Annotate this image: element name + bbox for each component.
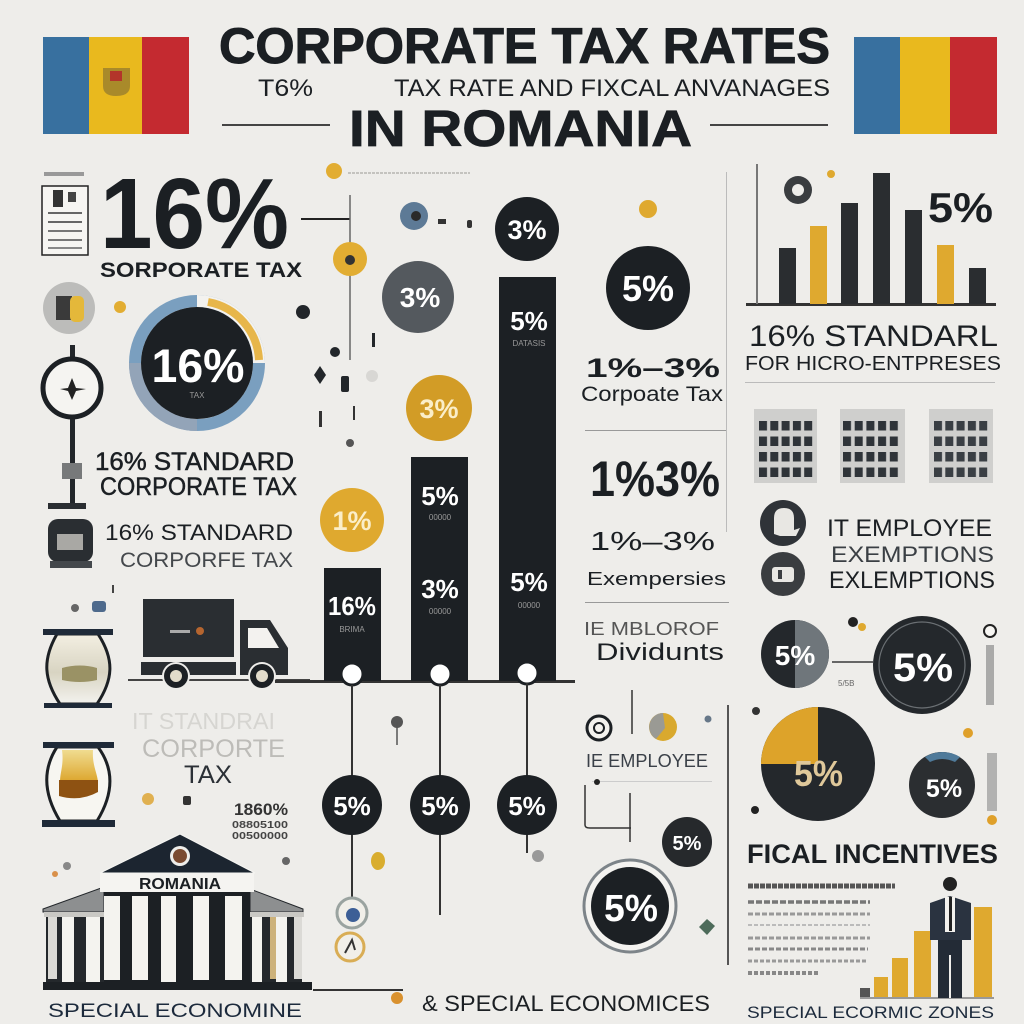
central bar chart: 16% [328, 591, 376, 621]
small print [232, 800, 289, 842]
label: 1%-3% exempersies: 1%–3% [590, 526, 715, 556]
big stat: 16% corporate tax: 16% [100, 158, 289, 270]
badge: 3% gold: 3% [419, 394, 459, 424]
small print: 1860% [234, 800, 288, 819]
label: 1%-3% exempersies [585, 526, 729, 603]
title: T6% [258, 75, 313, 102]
connector stems with 5% badges: 5% [333, 791, 371, 821]
label: dividends [584, 619, 724, 666]
small marks near truck [71, 585, 114, 612]
badge: 1% gold [320, 488, 384, 552]
icon: delivery truck [128, 599, 310, 690]
title: IN ROMANIA [349, 100, 692, 157]
badge: 5% large: 5% [622, 268, 674, 309]
pie chart: 5% [761, 707, 875, 821]
badge: 5% ring: 5/5B [838, 679, 854, 688]
donut: 16% tax: TAX [190, 391, 205, 400]
donut: 16% tax [135, 301, 259, 425]
small icons under stems [313, 716, 544, 1004]
icon: grid panels [754, 409, 993, 483]
icon: hourglass 2 [42, 742, 115, 827]
badge: 5% ring large: 5% [604, 888, 658, 930]
label: IT employee exemptions: EXEMPTIONS [831, 542, 994, 567]
pie badge: 5% half [761, 620, 829, 688]
badge: 5% small grey [751, 707, 997, 825]
badge: 1% gold: 1% [332, 506, 372, 536]
label: IT standard corporate tax, faded: IT STANDRAI [132, 708, 275, 734]
connector stems with 5% badges: 5% [421, 791, 459, 821]
central bar chart: 5% [421, 481, 459, 511]
central bar chart: 00000 [518, 601, 541, 610]
label: dividends: Dividunts [596, 639, 724, 666]
label: 16% standard corporate tax: 16% STANDARD [95, 448, 294, 476]
central bar chart: DATASIS [512, 339, 546, 348]
label: IT employee exemptions: EXLEMPTIONS [829, 567, 995, 594]
label: 1%-3% corporate tax: 1%–3% [586, 353, 720, 383]
icon: government building [43, 834, 312, 990]
title [219, 18, 830, 157]
label: 16% standard corporate tax, second: 16% STANDARD [105, 520, 293, 545]
donut: 16% tax: 16% [152, 339, 244, 392]
label: 16% standard for micro-enterprises [745, 320, 1001, 383]
label: IT employee exemptions: IT EMPLOYEE [827, 515, 992, 542]
icon: clock [43, 345, 101, 509]
flag: Romania right [854, 37, 997, 134]
badge: 5% small grey: 5% [926, 775, 962, 803]
central bar chart: 5% [510, 567, 548, 597]
label: special economic zones: SPECIAL ECORMIC ZONES [747, 1003, 994, 1022]
badge: 3% gold [406, 375, 472, 441]
icon: document [42, 172, 88, 255]
small decorative icons, centre [296, 163, 472, 447]
label: IE employee with icons: IE EMPLOYEE [586, 751, 708, 771]
small print: 00500000 [232, 831, 289, 842]
label: & special economics: & SPECIAL ECONOMICES [422, 991, 710, 1016]
pie badge: 5% half: 5% [775, 640, 815, 671]
badge: 3% grey [382, 261, 454, 333]
label: 16% standard for micro-enterprises: FOR HICRO-ENTPRESES [745, 353, 1001, 375]
badge: 5% small [662, 817, 712, 867]
small marks near building [52, 857, 290, 877]
vertical divider line [727, 705, 729, 965]
label: IE employee with icons [585, 690, 712, 842]
icon: hourglass 1 [43, 629, 113, 708]
icon: pot [48, 519, 93, 568]
central bar chart: BRIMA [339, 625, 365, 634]
small gold mark [114, 301, 126, 313]
central bar chart: 00000 [429, 607, 452, 616]
heading: fiscal incentives: FICAL INCENTIVES [747, 839, 998, 869]
small green mark [699, 919, 715, 935]
central bar chart: 3% [421, 574, 459, 604]
badge: 5% ring [832, 616, 996, 714]
label: 1%-3% corporate tax: Corpoate Tax [581, 383, 724, 406]
small gold icon [639, 200, 657, 218]
label: 1%-3% exempersies: Exempersies [587, 569, 726, 589]
connector stems with 5% badges: 5% [508, 791, 546, 821]
badge: 5% large [606, 246, 690, 330]
icon: government building: ROMANIA [139, 876, 221, 893]
badge: 3% dark top [495, 197, 559, 261]
pie chart: 5%: 5% [794, 753, 843, 794]
flag: Romania left [43, 37, 189, 134]
bar chart: top right [746, 164, 996, 306]
icon: coin badge [43, 282, 95, 334]
label: 16% standard corporate tax, second [105, 520, 293, 572]
central bar chart: 00000 [429, 513, 452, 522]
label: IT employee exemptions [827, 515, 995, 594]
badge: 5% small: 5% [673, 833, 702, 855]
label: 16% standard corporate tax: CORPORATE TAX [100, 473, 297, 501]
small text block [748, 886, 895, 973]
small marks [142, 793, 191, 805]
title: CORPORATE TAX RATES [219, 18, 830, 74]
badge: 3% grey: 3% [400, 282, 440, 313]
label: dividends: IE MBLOROF [584, 619, 719, 639]
label: IT standard corporate tax, faded: CORPORTE [142, 735, 285, 763]
badge: 3% dark top: 3% [507, 215, 547, 245]
badge: 5% ring: 5% [893, 646, 953, 690]
label: 16% standard corporate tax [95, 448, 297, 501]
label: 1%-3% corporate tax [581, 353, 727, 431]
label: 16% standard corporate tax, second: CORPORFE TAX [120, 549, 293, 572]
small print: 08805100 [232, 820, 289, 831]
central bar chart: 5% [510, 306, 548, 336]
label: IT standard corporate tax, faded [132, 708, 285, 789]
icons: IT employee [760, 500, 806, 596]
bar chart: top right: 5% [928, 184, 993, 231]
big stat: 16% corporate tax: SORPORATE TAX [100, 259, 302, 282]
label: special economic, left: SPECIAL ECONOMINE [48, 1001, 302, 1022]
central bar chart [275, 277, 575, 685]
chart with businessman [860, 877, 994, 999]
label: 16% standard for micro-enterprises: 16% STANDARL [749, 320, 998, 353]
connector stems with 5% badges [322, 683, 557, 915]
title: TAX RATE AND FIXCAL ANVANAGES [394, 75, 830, 102]
label: IT standard corporate tax, faded: TAX [184, 761, 232, 789]
badge: 5% ring large [584, 860, 676, 952]
big stat: 1%3%: 1%3% [590, 451, 720, 507]
